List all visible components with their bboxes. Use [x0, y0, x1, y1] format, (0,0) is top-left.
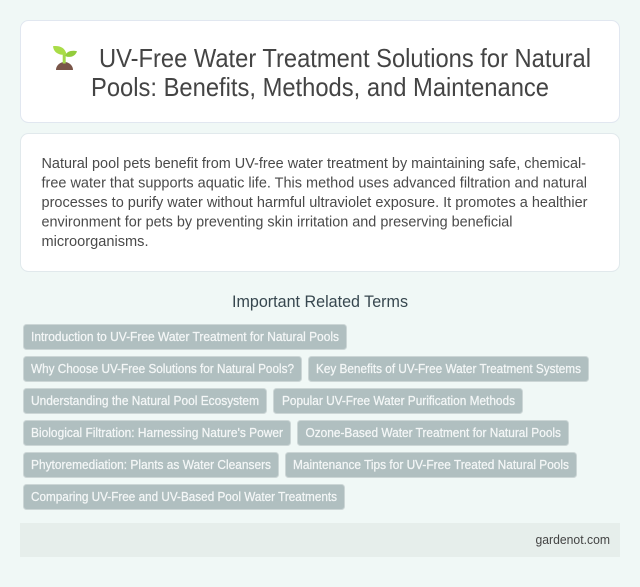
title: UV-Free Water Treatment Solutions for Natural [99, 43, 591, 73]
panel: description card [20, 134, 620, 272]
text block: description: processes to purify water without harmful ultraviolet exposure. It promotes a healthier [42, 194, 588, 211]
chip: maintenance [286, 452, 576, 478]
chip: comparing [24, 484, 344, 510]
chip: why choose: Why Choose UV-Free Solutions for Natural Pools? [31, 362, 294, 376]
icon: seedling [53, 46, 77, 70]
chip: purification methods: Popular UV-Free Water Purification Methods [282, 394, 515, 408]
chip: why choose [24, 356, 302, 382]
chip: key benefits: Key Benefits of UV-Free Water Treatment Systems [316, 362, 581, 376]
chip: ecosystem: Understanding the Natural Pool Ecosystem [31, 394, 259, 408]
title [91, 43, 591, 102]
chip: biological filtration [24, 420, 290, 446]
heading: related terms: Important Related Terms [232, 293, 408, 311]
chip: comparing: Comparing UV-Free and UV-Based Pool Water Treatments [31, 490, 337, 504]
text block: description: free water that supports aquatic life. This method uses advanced filtration and natural [42, 174, 587, 192]
panel: related term chips [24, 324, 588, 510]
chip: purification methods [274, 388, 522, 414]
text block: description: Natural pool pets benefit from UV-free water treatment by maintaining safe, chemical- [42, 155, 586, 172]
text block: description: environment for pets by preventing skin irritation and preserving beneficial [42, 214, 512, 230]
title: Pools: Benefits, Methods, and Maintenance [91, 72, 549, 102]
chip: phytoremediation [24, 452, 278, 478]
chip: ozone [298, 420, 568, 446]
chip: biological filtration: Biological Filtration: Harnessing Nature's Power [31, 426, 283, 440]
chip: introduction: Introduction to UV-Free Water Treatment for Natural Pools [31, 330, 339, 344]
footer: gardenot.com [536, 533, 610, 547]
panel: title card [20, 20, 620, 122]
chip: phytoremediation: Phytoremediation: Plants as Water Cleansers [31, 458, 271, 472]
footer [20, 523, 620, 557]
chip: key benefits [308, 356, 588, 382]
chip: introduction [24, 324, 346, 350]
chip: ecosystem [24, 388, 266, 414]
text block: description: microorganisms. [42, 233, 148, 250]
chip: ozone: Ozone-Based Water Treatment for Natural Pools [306, 426, 561, 440]
text block: description [42, 155, 588, 250]
chip: maintenance: Maintenance Tips for UV-Free Treated Natural Pools [293, 458, 569, 472]
